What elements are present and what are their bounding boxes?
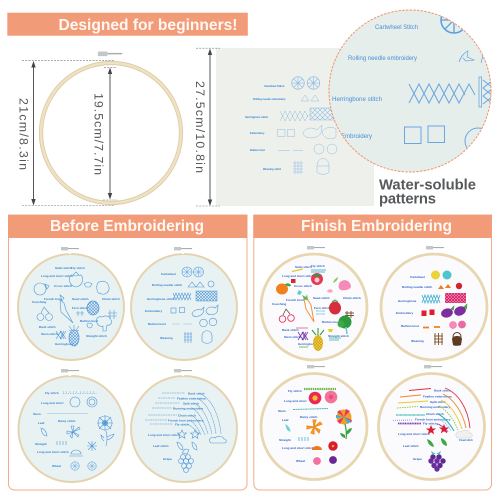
hoop: flower patterns: Long and short stitch [37, 450, 69, 454]
wooden hoop with size dimensions [16, 52, 181, 205]
hoop: fruit patterns: Cross stitch [54, 284, 72, 288]
hoop: fruit patterns: Couching [32, 300, 46, 304]
hoop: finished flowers: Long and short [284, 399, 307, 403]
hoop: finished flowers: Long and short stitch [282, 446, 314, 450]
caption: water-soluble patterns: patterns [379, 192, 436, 208]
hoop: finished fruit: Straight stitch [328, 334, 349, 338]
hoop: finished fruit: Herringbone [298, 342, 317, 346]
hoop: finished cartwheels: Embroidery [396, 311, 413, 315]
hoop: finished rainbow: Split stitch [430, 400, 446, 404]
hoop: finished fruit: Long and short stitch [282, 274, 314, 278]
hoop: finished rainbow: Leaf stitch [403, 444, 419, 448]
hoop: finished rainbow: Back stitch [434, 388, 451, 392]
enlarged pattern contents: Rolling needle embroidery [348, 55, 418, 62]
hoop: flower patterns [18, 369, 124, 482]
hoop: flower patterns: Stem [33, 412, 41, 416]
hoop: finished cartwheels: Cartwheel [410, 275, 425, 279]
printed pattern motifs: Embroidery [250, 131, 265, 135]
enlarged pattern contents: Herringbone stitch [332, 96, 383, 103]
printed pattern motifs: Weaving stitch [263, 167, 282, 171]
hoop: cartwheel patterns [131, 247, 237, 360]
hoop: finished rainbow: Cloud stitch [459, 439, 473, 442]
hoop: finished fruit: Fern stitch [314, 306, 330, 310]
hoop: finished fruit: Satin stitch [295, 265, 312, 269]
hoop: rainbow patterns: Back stitch [188, 392, 205, 396]
hoop: finished flowers: Stem [278, 409, 286, 413]
hoop: rainbow patterns: Leaf stitch [153, 444, 169, 448]
hoop: finished fruit: Back stitch [282, 328, 299, 332]
hoop: finished flowers: Leaf [282, 418, 289, 422]
hoop: finished fruit: Seed stitch [313, 296, 330, 300]
hoop: fruit patterns: Chain stitch [102, 297, 120, 301]
panel: finish embroidering [253, 215, 492, 490]
hoop: cartwheel patterns: Herringbone stitch [147, 297, 175, 301]
hoop: fruit patterns: Fly stitch [71, 266, 85, 270]
hoop: flower patterns: Fly stitch [45, 391, 59, 395]
hoop: rainbow patterns: Running embroidery [173, 406, 204, 410]
enlarged pattern contents: Cartwheel Stitch [375, 24, 419, 31]
caption: water-soluble patterns: Water-soluble [379, 178, 476, 194]
hoop: flower patterns: Daisy stitch [58, 419, 75, 423]
hoop: finished rainbow [378, 365, 484, 480]
hoop: finished rainbow: Fly stitch [423, 422, 437, 426]
hoop: finished fruit: Couching [272, 302, 286, 306]
hoop: finished fruit: French knot [286, 298, 304, 302]
hoop: rainbow patterns: Fly stitch [175, 422, 189, 426]
hoop: flower patterns: Wheel [52, 464, 61, 468]
hoop: rainbow patterns [131, 369, 237, 482]
hoop: finished flowers: Wheel [296, 459, 305, 463]
hoop: finished cartwheels: Herringbone [398, 299, 417, 303]
dimension: outer diameter arrow [16, 61, 115, 206]
printed pattern motifs [245, 77, 337, 174]
hoop: fruit patterns: French knot [44, 297, 62, 301]
enlarged pattern contents: Embroidery [341, 133, 373, 140]
hoop: finished cartwheels: Rolling needle stitch [402, 285, 432, 289]
enlarged pattern contents [332, 16, 491, 148]
printed pattern motifs: Rolling needle embroidery [253, 97, 286, 101]
hoop: rainbow patterns: French knot embroidery [168, 418, 204, 422]
hoop: fruit patterns: Bullion knot [80, 319, 98, 323]
label: 19.5cm/7.7in: 19.5cm/7.7in [92, 93, 106, 175]
hoop: finished flowers [261, 365, 367, 480]
hoop: finished cartwheels [381, 246, 487, 360]
hoop: cartwheel patterns: Rolling needle stitch [152, 283, 182, 287]
hoop: rainbow patterns: Grape [163, 457, 172, 461]
hoop: fruit patterns: Satin stitch [55, 266, 72, 270]
hoop: fruit patterns: Fern stitch [72, 306, 88, 310]
hoop: finished fruit [261, 246, 367, 360]
printed pattern motifs: Cartwheel Stitch [264, 84, 285, 88]
hoop: rainbow patterns: Split stitch [183, 402, 199, 406]
fabric sheet with printed patterns [193, 48, 374, 206]
heading: before embroidering: Before Embroidering [50, 218, 204, 235]
hoop: rainbow patterns: Feather embroidery [177, 396, 206, 400]
banner: designed for beginners [7, 13, 248, 36]
label: 27.5cm/10.8in: 27.5cm/10.8in [193, 81, 207, 173]
hoop: finished rainbow: French knot embroidery [415, 418, 451, 422]
hoop: finished rainbow: Grape [413, 457, 422, 461]
hoop: fruit patterns: Seed stitch [72, 297, 89, 301]
hoop: finished flowers: Daisy stitch [300, 415, 317, 419]
hoop: cartwheel patterns: Bullion knot [148, 322, 166, 326]
hoop: finished rainbow: Feather embroidery [423, 394, 452, 398]
label: 21cm/8.3in: 21cm/8.3in [16, 98, 30, 170]
icon: wooden hoop ring [41, 52, 181, 203]
hoop: rainbow patterns: Long and short stitch [148, 433, 180, 437]
hoop: finished fruit: Bullion knot [322, 320, 340, 324]
hoop: finished flowers: Fly stitch [288, 389, 302, 393]
hoop: fruit patterns: Back stitch [39, 325, 56, 329]
hoop: flower patterns: Leaf [38, 421, 45, 425]
hoop: finished rainbow: Long and short stitch [398, 432, 430, 436]
hoop: flower patterns: Long and short [41, 401, 64, 405]
hoop: cartwheel patterns: Weaving [160, 336, 173, 340]
fabric size dimension [193, 48, 220, 206]
hoop: finished fruit: Fly stitch [311, 264, 325, 268]
hoop: finished rainbow: Chain stitch [426, 412, 444, 416]
hoop: flower patterns: Straight [35, 442, 47, 446]
hoop: cartwheel patterns: Cartwheel [161, 272, 176, 276]
hoop: fruit patterns: Long and short stitch [41, 274, 73, 278]
hoop: finished fruit: Cross stitch [294, 284, 312, 288]
hoop: finished cartwheels: Bullion knot [401, 324, 419, 328]
hoop: fruit patterns [18, 247, 124, 360]
hoop: cartwheel patterns: Embroidery [145, 309, 162, 313]
dimension: inner diameter arrow [92, 67, 117, 200]
printed pattern motifs: Herringbone stitch [245, 115, 268, 119]
banner heading: Designed for beginners! [58, 17, 238, 34]
caption: water-soluble patterns [379, 178, 476, 208]
hoop: fruit patterns: Straight stitch [86, 334, 107, 338]
hoop: finished fruit: Stem stitch [284, 335, 301, 339]
hoop: rainbow patterns: Chain stitch [178, 414, 196, 418]
hoop: fruit patterns: Stem stitch [41, 332, 58, 336]
panel: before embroidering [8, 215, 248, 490]
heading: finish embroidering: Finish Embroidering [301, 218, 452, 235]
magnifier circle with enlarged pattern [329, 7, 493, 172]
hoop: finished flowers: Straight [279, 438, 291, 442]
hoop: finished fruit: Chain stitch [343, 296, 361, 300]
hoop: finished rainbow: Running embroidery [420, 405, 451, 409]
printed pattern motifs: Bullion knot [250, 148, 265, 152]
hoop: fruit patterns: Herringbone [55, 342, 74, 346]
hoop: finished cartwheels: Weaving [411, 339, 424, 343]
